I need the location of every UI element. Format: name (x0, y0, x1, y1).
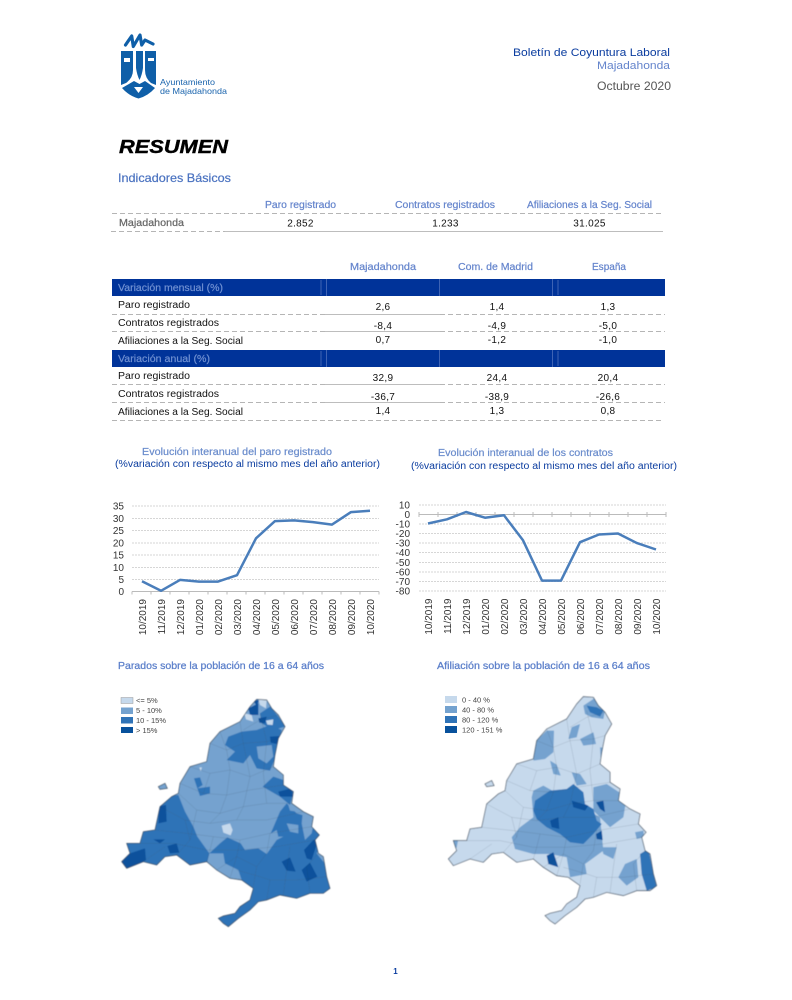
rows: monthly variation: -5,0 (599, 321, 617, 332)
rows: annual variation: -38,9 (485, 392, 509, 403)
logo (121, 35, 227, 98)
rows: annual variation: -36,7 (371, 392, 395, 403)
rows: annual variation: -26,6 (596, 392, 620, 403)
heading: unemployment chart: (%variación con respecto al mismo mes del año anterior) (115, 459, 380, 470)
x axis labels: 01/2020 (481, 598, 492, 635)
table: basic indicators: Majadahonda (119, 218, 184, 229)
x axis labels: 06/2020 (290, 599, 301, 635)
x axis labels: 10/2019 (424, 598, 435, 635)
header: bulletin title: Boletín de Coyuntura Laboral (513, 47, 670, 59)
y axis labels: -70 (396, 577, 410, 588)
map legend: unemployed: <= 5% (136, 696, 158, 705)
x axis labels: 11/2019 (443, 598, 454, 634)
heading: unemployment chart: Evolución interanual del paro registrado (142, 447, 332, 458)
band: monthly variation: Variación mensual (%) (118, 283, 223, 294)
x axis labels: 09/2020 (347, 599, 358, 635)
rows: annual variation: Afiliaciones a la Seg. Social (118, 407, 243, 418)
x axis labels: 10/2020 (652, 598, 663, 635)
south and west band (126, 794, 330, 926)
y axis labels: 0 (404, 510, 410, 521)
light patch south (207, 853, 242, 880)
logo text: de Majadahonda (160, 86, 227, 96)
rows: annual variation (112, 371, 665, 420)
y axis labels: 35 (113, 502, 124, 512)
map legend: unemployed: > 15% (136, 726, 158, 735)
y axis labels: -30 (396, 538, 410, 550)
x axis labels: 07/2020 (309, 599, 320, 635)
x axis labels: 01/2020 (195, 599, 206, 635)
line chart: contracts (396, 500, 666, 635)
x axis labels: 10/2020 (366, 599, 377, 635)
rows: annual variation: Paro registrado (118, 371, 190, 382)
rows: annual variation: 20,4 (598, 373, 618, 384)
x axis labels (424, 598, 663, 635)
column headers: España (592, 262, 626, 273)
lightest municipalities (199, 699, 273, 835)
x axis labels: 05/2020 (557, 598, 568, 635)
icon: municipal shield (121, 35, 156, 98)
rows: monthly variation (112, 300, 665, 347)
rows: annual variation: 32,9 (373, 373, 393, 384)
rows: monthly variation: Paro registrado (118, 300, 190, 311)
map legend: affiliation: 120 - 151 % (462, 726, 503, 734)
heading: unemployed map: Parados sobre la población de 16 a 64 años (118, 661, 324, 672)
table: basic indicators: Paro registrado (265, 200, 336, 211)
header: bulletin title: Octubre 2020 (597, 81, 671, 93)
x axis labels: 10/2019 (138, 599, 149, 635)
table: variations (112, 262, 665, 420)
table: basic indicators (111, 200, 663, 232)
darkest municipalities (547, 801, 605, 867)
x axis labels: 06/2020 (576, 598, 587, 635)
logo text: Ayuntamiento (160, 77, 215, 87)
rows: annual variation: Contratos registrados (118, 389, 219, 400)
y axis labels: 20 (113, 538, 124, 550)
y axis labels: 10 (399, 500, 410, 512)
rows: monthly variation: Contratos registrados (118, 318, 219, 329)
heading: contracts chart (411, 448, 677, 472)
rows: monthly variation: -1,2 (488, 335, 506, 346)
x axis labels: 04/2020 (252, 599, 263, 635)
map legend: unemployed: 10 - 15% (136, 716, 166, 725)
heading: basic indicators: Indicadores Básicos (118, 171, 231, 185)
title: RESUMEN (119, 136, 229, 157)
y axis labels: 10 (113, 563, 124, 574)
map legend: unemployed (121, 696, 166, 735)
x axis labels: 11/2019 (157, 599, 168, 634)
header: bulletin title (513, 47, 671, 93)
rows: monthly variation: Afiliaciones a la Seg. Social (118, 336, 243, 347)
map legend: affiliation (445, 696, 503, 734)
rows: annual variation: 1,4 (376, 406, 391, 417)
table: basic indicators: Contratos registrados (395, 200, 495, 211)
map legend: affiliation: 80 - 120 % (462, 716, 499, 724)
y axis labels (396, 500, 410, 598)
y axis labels: 15 (113, 550, 124, 562)
map: unemployed over population (120, 698, 331, 928)
rows: annual variation: 24,4 (487, 373, 507, 384)
x axis labels: 08/2020 (614, 598, 625, 635)
y axis labels: -40 (396, 548, 410, 559)
north band (225, 725, 282, 771)
map legend: affiliation: 40 - 80 % (462, 706, 494, 714)
table: basic indicators: 31.025 (573, 218, 606, 230)
rows: monthly variation: 0,7 (376, 335, 391, 346)
x axis labels: 04/2020 (538, 598, 549, 635)
band: annual variation (112, 350, 665, 367)
x axis labels: 09/2020 (633, 598, 644, 635)
x axis labels: 03/2020 (519, 598, 530, 635)
y axis labels: 5 (118, 575, 124, 586)
rows: monthly variation: 1,3 (601, 302, 616, 313)
band: monthly variation (112, 279, 665, 296)
y axis labels: -50 (396, 558, 410, 569)
rows: annual variation: 1,3 (490, 406, 505, 417)
header: bulletin title: Majadahonda (597, 60, 671, 72)
y axis labels: -80 (396, 586, 410, 598)
rows: monthly variation: -8,4 (374, 321, 392, 332)
y axis labels: -20 (396, 529, 410, 540)
x axis labels: 12/2019 (462, 598, 473, 635)
y axis labels (113, 502, 124, 598)
x axis labels: 08/2020 (328, 599, 339, 635)
map: affiliation over population (448, 697, 657, 924)
table: basic indicators: Afiliaciones a la Seg. Social (527, 200, 652, 211)
rows: monthly variation: -1,0 (599, 335, 617, 346)
line chart: unemployment (113, 502, 379, 635)
table: basic indicators: 2.852 (287, 218, 314, 230)
x axis labels: 02/2020 (500, 598, 511, 635)
x axis labels: 03/2020 (233, 599, 244, 635)
x axis labels (138, 599, 377, 635)
heading: contracts chart: (%variación con respecto al mismo mes del año anterior) (411, 461, 677, 472)
column headers: Majadahonda (350, 262, 416, 273)
rows: monthly variation: -4,9 (488, 321, 506, 332)
rows: monthly variation: 2,6 (376, 302, 391, 313)
heading: affiliation map: Afiliación sobre la población de 16 a 64 años (437, 661, 650, 672)
logo text (160, 77, 227, 96)
x axis labels: 02/2020 (214, 599, 225, 635)
darkest municipalities (120, 700, 318, 882)
y axis labels: -60 (396, 568, 410, 578)
y axis labels: 30 (113, 514, 124, 525)
page number: 1 (393, 967, 398, 976)
column headers: Com. de Madrid (458, 262, 533, 273)
x axis labels: 07/2020 (595, 598, 606, 635)
x axis labels: 12/2019 (176, 599, 187, 635)
band: annual variation: Variación anual (%) (118, 354, 210, 365)
column headers (350, 262, 626, 273)
medium municipalities (450, 697, 644, 886)
y axis labels: 25 (113, 526, 124, 537)
table: basic indicators: 1.233 (432, 218, 459, 230)
x axis labels: 05/2020 (271, 599, 282, 635)
y axis labels: -10 (396, 520, 410, 530)
dark central municipalities (533, 706, 657, 891)
heading: contracts chart: Evolución interanual de los contratos (438, 448, 613, 459)
y axis labels: 0 (118, 587, 124, 598)
heading: unemployment chart (115, 447, 380, 470)
map legend: unemployed: 5 - 10% (136, 706, 162, 715)
rows: annual variation: 0,8 (601, 406, 616, 417)
rows: monthly variation: 1,4 (490, 302, 505, 313)
map legend: affiliation: 0 - 40 % (462, 696, 490, 704)
